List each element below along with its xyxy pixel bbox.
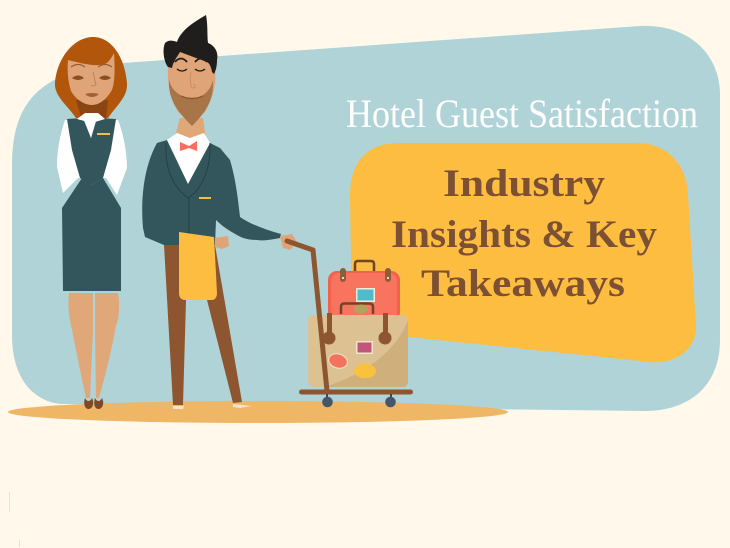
man trousers [164,245,242,405]
woman skirt [62,178,121,291]
bellhop man [142,15,297,409]
man face [168,48,215,124]
inner handle [341,304,373,314]
woman hair [55,37,127,118]
man left hand [215,236,229,249]
woman neck shadow [76,100,108,120]
woman vest [67,118,116,185]
beige suitcase [308,313,408,387]
man jacket seams [166,143,210,245]
woman collar [77,113,105,138]
suitcase shade [325,320,408,387]
man smile and eyes [175,58,207,98]
man beard [169,80,213,126]
red suitcase [328,261,400,321]
floor ellipse [8,401,508,423]
man hair [164,15,217,74]
stickers [356,341,373,354]
man bow tie [180,141,197,151]
suitcase straps [327,313,332,341]
teal background blob [12,26,720,411]
man jacket and arm [142,140,281,245]
man right hand [280,234,297,250]
title: hotel guest satisfaction: Hotel Guest Satisfaction [346,91,698,136]
red suitcase body [328,271,400,321]
man badge [199,197,211,199]
heading: industry insights and key takeaways [391,162,658,305]
luggage cart [287,241,413,407]
woman face [68,53,115,105]
man shoes [173,404,252,409]
heading: industry insights and key takeaways: Takeaways [421,262,625,305]
red suitcase straps [340,268,346,282]
man neck [174,118,206,140]
cart base [299,390,413,394]
woman facial features [71,64,112,97]
woman legs [68,293,119,398]
small corner marks [9,492,20,547]
cart handle [287,241,327,391]
man apron [179,232,217,300]
woman shirt and arms [57,120,127,195]
woman badge [97,133,110,135]
heading: industry insights and key takeaways: Industry [443,162,606,205]
cart wheels [322,394,396,407]
woman shoes [84,398,103,409]
man shirt [167,133,210,184]
blue label [356,288,375,302]
red suitcase handle [355,261,374,272]
yellow title panel [350,143,696,362]
heading: industry insights and key takeaways: Insights & Key [391,213,658,256]
woman concierge [55,37,127,409]
